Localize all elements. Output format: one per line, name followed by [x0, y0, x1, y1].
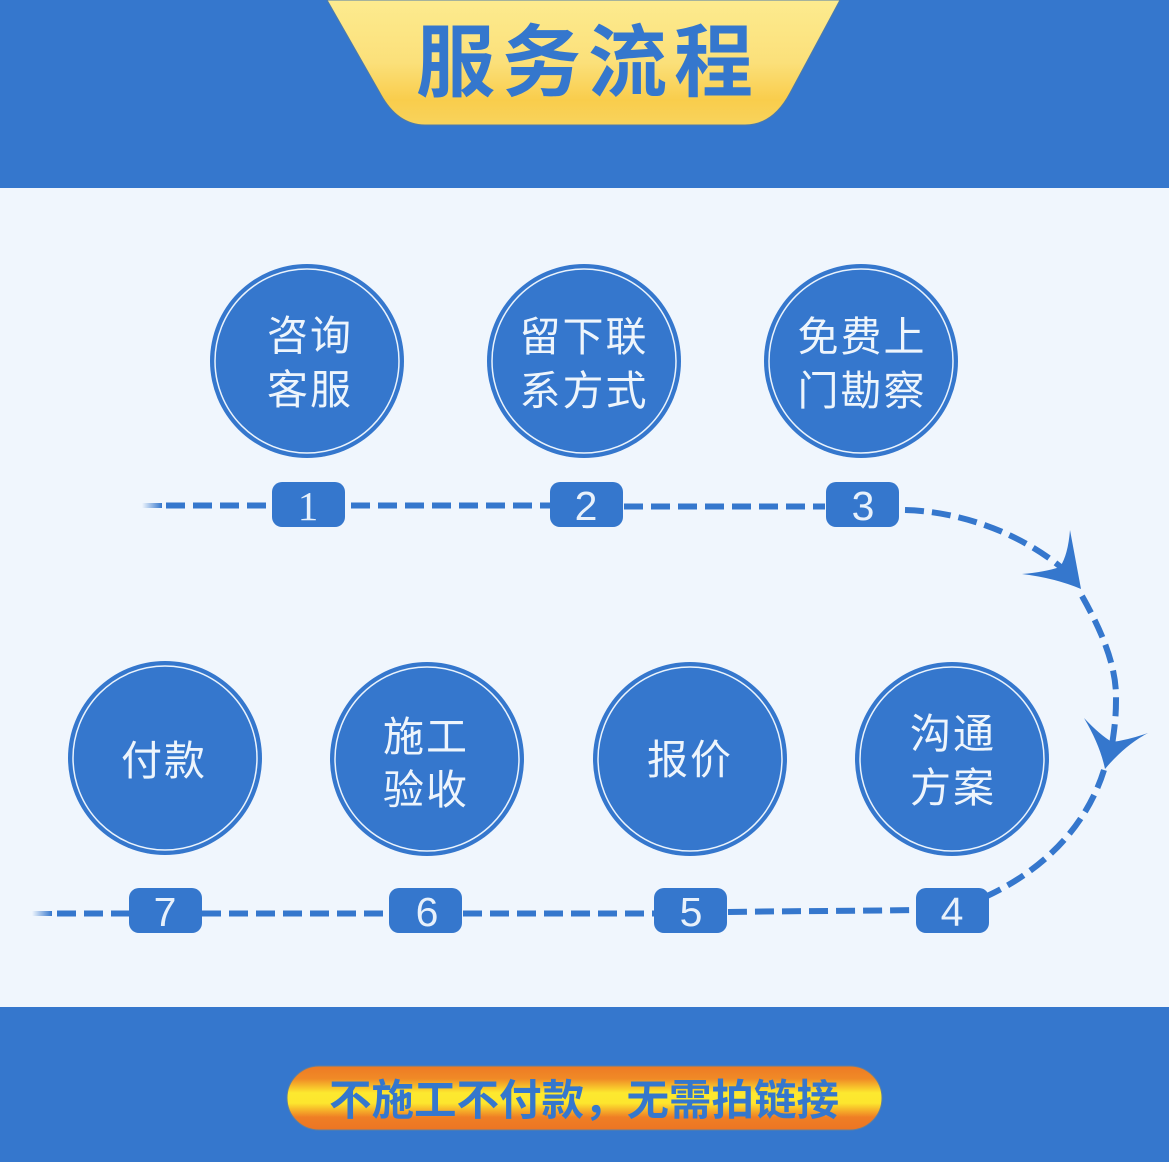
arrow two [1084, 718, 1148, 769]
step 2 circle: 留下联系方式: 留下联 [520, 314, 648, 360]
badge 5: 5 [680, 889, 702, 935]
step 2 circle: 留下联系方式: 系方式 [520, 368, 648, 414]
step 4 circle: 沟通方案: 方案 [910, 765, 996, 811]
step 4 circle: 沟通方案: 沟通 [910, 711, 996, 757]
dashed curve from step 3 to first arrow [905, 510, 1062, 568]
top header band [0, 0, 1169, 188]
arrow one [1022, 530, 1081, 589]
step 4 circle: 沟通方案 [855, 662, 1049, 856]
step 6 circle: 施工验收: 施工 [383, 714, 469, 760]
footer pill slogan [287, 1066, 882, 1130]
step 1 circle: 咨询客服: 咨询 [267, 313, 353, 359]
step 5 circle: 报价: 报价 [647, 737, 733, 783]
title banner [327, 0, 840, 125]
step 3 circle: 免费上门勘察: 门勘察 [798, 368, 926, 414]
badge 5 [654, 888, 727, 935]
badge 6 [389, 888, 462, 935]
badge 7 [129, 888, 202, 935]
badge 3: 3 [852, 483, 874, 529]
step 1 circle: 咨询客服: 客服 [267, 367, 353, 413]
badge 1: 1 [298, 483, 318, 529]
badge 7: 7 [154, 889, 176, 935]
footer pill slogan: 不施工不付款，无需拍链接 [329, 1078, 839, 1125]
step 3 circle: 免费上门勘察 [764, 264, 958, 458]
dashed curve from second arrow to step 4 [985, 770, 1104, 897]
dashed path: top row [142, 503, 825, 508]
step 6 circle: 施工验收 [330, 662, 524, 856]
bottom footer band [0, 1007, 1169, 1162]
badge 4 [916, 888, 989, 935]
badge 2 [550, 482, 623, 529]
badge 4: 4 [941, 889, 963, 935]
step 7 circle: 付款: 付款 [121, 738, 207, 784]
badge 6: 6 [416, 889, 438, 935]
step 1 circle: 咨询客服 [210, 264, 404, 458]
step 5 circle: 报价 [593, 662, 787, 856]
badge 3 [826, 482, 899, 529]
step 6 circle: 施工验收: 验收 [383, 767, 469, 813]
step 3 circle: 免费上门勘察: 免费上 [798, 314, 926, 360]
title banner: 服务流程 [416, 18, 760, 107]
step 2 circle: 留下联系方式 [487, 264, 681, 458]
step 7 circle: 付款 [68, 661, 262, 855]
badge 1 [272, 482, 345, 529]
badge 2: 2 [575, 483, 597, 529]
dashed path: bottom row [32, 910, 917, 916]
dashed curve from first arrow to second arrow [1082, 596, 1116, 745]
